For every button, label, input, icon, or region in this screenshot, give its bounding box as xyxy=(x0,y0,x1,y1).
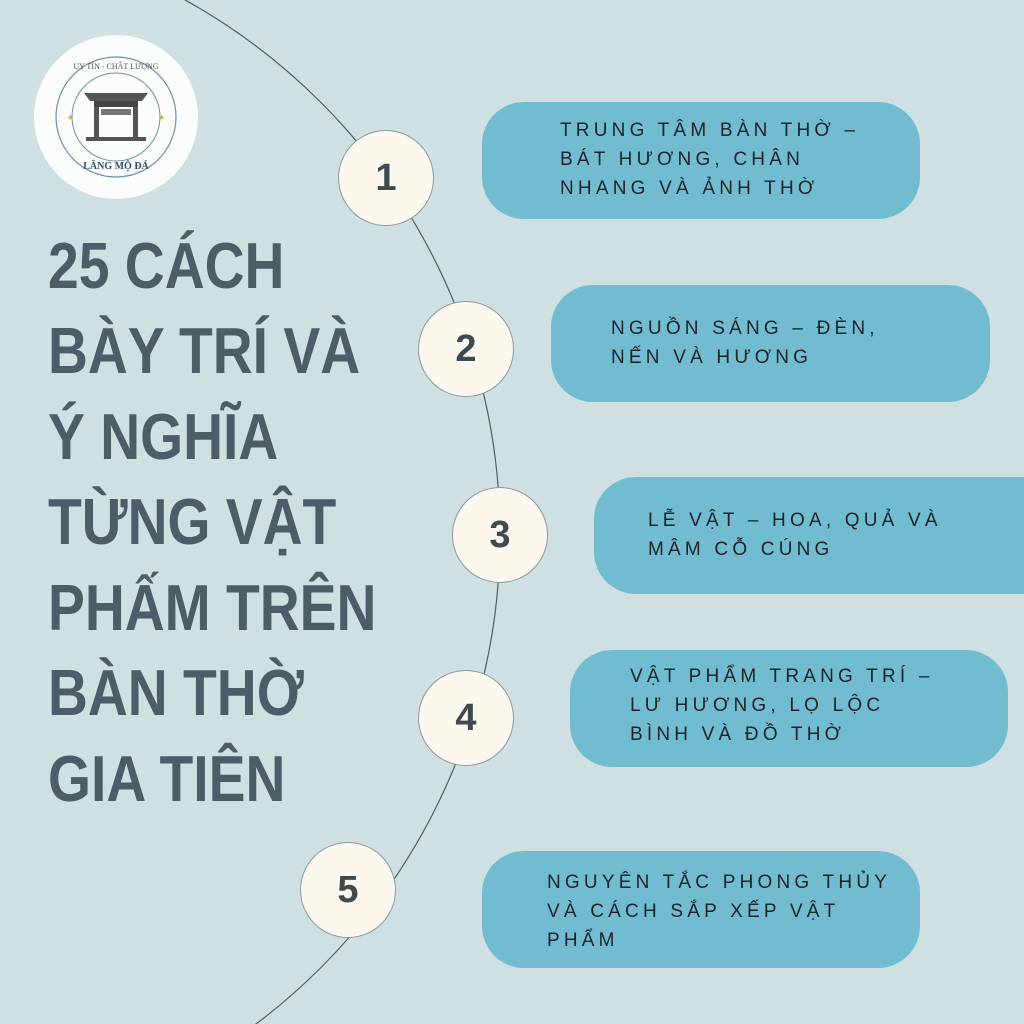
title xyxy=(48,229,376,815)
pill 2 xyxy=(551,285,990,402)
title: PHẤM TRÊN xyxy=(48,571,376,644)
pill 4: VẬT PHẨM TRANG TRÍ – xyxy=(630,666,934,687)
title: GIA TIÊN xyxy=(48,742,285,815)
pill 5: PHẨM xyxy=(547,930,619,951)
number circle 2 xyxy=(418,301,514,397)
title: TỪNG VẬT xyxy=(48,485,336,558)
logo: ★ xyxy=(158,113,165,122)
pill 3: LỄ VẬT – HOA, QUẢ VÀ xyxy=(648,510,942,531)
number circle 4: 4 xyxy=(455,696,477,738)
title: BÀN THỜ xyxy=(48,656,304,729)
pill 1: TRUNG TÂM BÀN THỜ – xyxy=(560,120,859,141)
pill 5: VÀ CÁCH SẮP XẾP VẬT xyxy=(547,901,839,922)
pill 4: BÌNH VÀ ĐỒ THỜ xyxy=(630,724,845,745)
number circle 2: 2 xyxy=(455,328,477,370)
number circle 4 xyxy=(418,670,514,766)
pill 1: NHANG VÀ ẢNH THỜ xyxy=(560,178,818,199)
number circle 1: 1 xyxy=(375,156,397,198)
pill 5: NGUYÊN TẮC PHONG THỦY xyxy=(547,872,891,893)
pill 3: MÂM CỖ CÚNG xyxy=(648,539,834,560)
title: Ý NGHĨA xyxy=(48,400,278,473)
logo: LĂNG MỘ ĐÁ xyxy=(83,159,150,172)
title: BÀY TRÍ VÀ xyxy=(48,314,360,387)
logo: ★ xyxy=(67,113,74,122)
logo xyxy=(34,35,198,199)
pill 1: BÁT HƯƠNG, CHÂN xyxy=(560,149,804,170)
number circle 5 xyxy=(300,842,396,938)
number circle 5: 5 xyxy=(337,868,359,910)
pill 3 xyxy=(594,477,1024,594)
pill 4 xyxy=(570,650,1008,767)
title: 25 CÁCH xyxy=(48,229,284,302)
pill 4: LƯ HƯƠNG, LỌ LỘC xyxy=(630,695,884,716)
number circle 1 xyxy=(338,130,434,226)
pill 2: NẾN VÀ HƯƠNG xyxy=(611,347,812,368)
number circle 3 xyxy=(452,487,548,583)
pill 5 xyxy=(482,851,920,968)
pill 1 xyxy=(482,102,920,219)
logo: UY TÍN - CHẤT LƯỢNG xyxy=(73,61,159,71)
pill 2: NGUỒN SÁNG – ĐÈN, xyxy=(611,318,879,339)
number circle 3: 3 xyxy=(489,514,511,556)
